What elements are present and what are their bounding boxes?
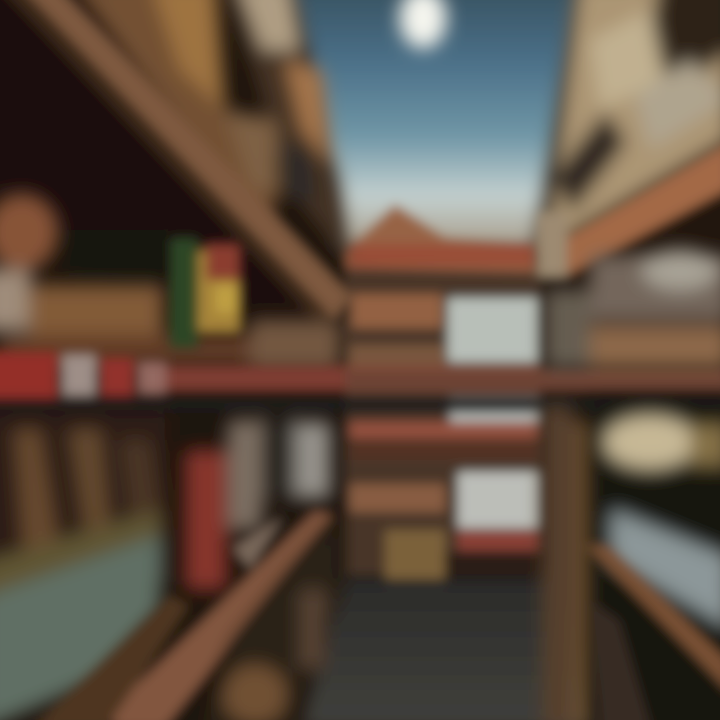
left lower products — [0, 412, 170, 720]
left middle products — [0, 194, 340, 370]
left upper shelf dark area — [0, 0, 340, 310]
left lower floor items — [200, 515, 340, 720]
right upright post — [542, 405, 588, 720]
right middle products — [545, 250, 720, 368]
red column — [185, 410, 330, 590]
green and yellow product — [170, 238, 240, 348]
right lower shelves — [590, 400, 720, 720]
left lower diagonal shelf — [30, 510, 335, 720]
aisle floor — [300, 575, 585, 720]
right lower diagonal shelf — [585, 545, 720, 720]
left upper boxes — [70, 0, 345, 260]
right diagonal shelf — [537, 142, 720, 290]
ceiling — [290, 0, 580, 250]
back shelves — [345, 205, 540, 580]
horizontal red shelf — [0, 352, 720, 411]
right upper shelves — [545, 0, 720, 250]
left upper diagonal shelf — [0, 0, 352, 324]
ceiling light — [400, 0, 446, 48]
